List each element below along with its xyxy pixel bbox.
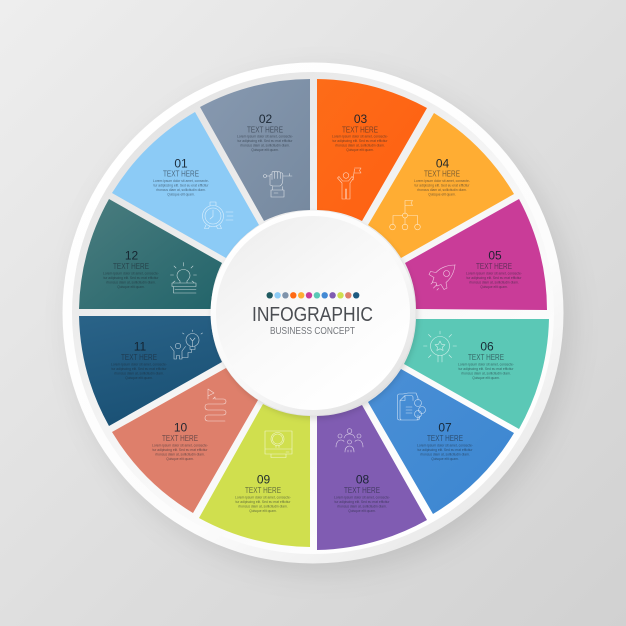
body text 08: tur adipiscing elit. Sed eu erat efficitur (335, 500, 390, 504)
body text 11: rhoncus diam at, sollicitudin diam. (114, 372, 164, 376)
body text 08 (334, 496, 390, 513)
heading 01: 01 (174, 156, 188, 170)
body text 07: Quisque elit quam. (431, 457, 459, 461)
body text 09 (235, 496, 291, 513)
body text 04 (414, 179, 470, 196)
heading 01: TEXT HERE (163, 168, 199, 178)
heading 12 (113, 248, 149, 271)
heading 02: 02 (259, 112, 272, 126)
body text 10: rhoncus diam at, sollicitudin diam. (155, 452, 205, 456)
body text 03: Lorem ipsum dolor sit amet, consecte- (332, 134, 388, 138)
outer white ring (62, 62, 564, 564)
body text 02: Lorem ipsum dolor sit amet, consecte- (237, 134, 293, 138)
body text 01: rhoncus diam at, sollicitudin diam. (156, 188, 206, 192)
heading 02: TEXT HERE (247, 124, 283, 134)
body text 12: tur adipiscing elit. Sed eu erat efficitur (104, 276, 159, 280)
body text 11: Lorem ipsum dolor sit amet, consecte- (111, 362, 167, 366)
heading 11: 11 (134, 340, 147, 354)
segment 03 (317, 79, 427, 221)
color dots (266, 292, 359, 298)
segment 02 (200, 79, 310, 221)
icon: raised fist (264, 171, 292, 197)
body text 08: Quisque elit quam. (348, 509, 376, 513)
heading 03 (342, 112, 378, 134)
body text 11 (111, 362, 167, 380)
body text 03: rhoncus diam at, sollicitudin diam. (335, 144, 385, 148)
body text 06: tur adipiscing elit. Sed eu erat efficitur (459, 367, 514, 371)
body text 01: Quisque elit quam. (167, 192, 195, 196)
icon: person and bulb (170, 330, 202, 359)
icon: people group (336, 429, 363, 452)
heading 07: TEXT HERE (427, 433, 463, 443)
icon: org flag (390, 200, 420, 230)
body text 04: Lorem ipsum dolor sit amet, consecte- (414, 179, 470, 183)
body text 02 (237, 134, 293, 152)
body text 05: tur adipiscing elit. Sed eu erat efficitur (467, 276, 522, 280)
body text 06: rhoncus diam at, sollicitudin diam. (461, 372, 511, 376)
body text 05: Quisque elit quam. (480, 285, 508, 289)
heading 11: TEXT HERE (121, 352, 157, 362)
icon: bulb on book (170, 262, 196, 293)
heading 07: 07 (438, 420, 452, 434)
icon: person with flag (338, 168, 361, 199)
panel: 07 (368, 369, 514, 514)
panel: 11 (79, 316, 222, 426)
body text 03: tur adipiscing elit. Sed eu erat efficitur (333, 139, 388, 143)
panel: 01 (112, 112, 259, 258)
panel: 06 (404, 319, 549, 429)
heading 09 (245, 472, 281, 495)
segment 07 (368, 369, 514, 514)
body text 06: Lorem ipsum dolor sit amet, consecte- (458, 362, 514, 366)
body text 02: rhoncus diam at, sollicitudin diam. (240, 144, 290, 148)
body text 09: rhoncus diam at, sollicitudin diam. (238, 504, 288, 508)
heading 04: 04 (436, 156, 449, 170)
ring shadow (72, 73, 572, 573)
heading 10 (162, 420, 198, 443)
body text 09: tur adipiscing elit. Sed eu erat efficitur (236, 500, 291, 504)
body text 11: tur adipiscing elit. Sed eu erat efficitur (112, 367, 167, 371)
panel: 09 (199, 404, 310, 547)
body text 01: Lorem ipsum dolor sit amet, consecte- (153, 179, 209, 183)
heading 12: TEXT HERE (113, 261, 149, 271)
panel: 03 (317, 79, 427, 221)
heading 06 (468, 340, 504, 362)
heading 11 (121, 340, 157, 362)
heading 02 (247, 112, 283, 134)
title: INFOGRAPHIC (252, 303, 373, 326)
center circle (210, 210, 416, 416)
body text 08: rhoncus diam at, sollicitudin diam. (337, 504, 387, 508)
heading 04: TEXT HERE (424, 168, 460, 178)
heading 08 (344, 472, 380, 495)
body text 04: rhoncus diam at, sollicitudin diam. (417, 188, 467, 192)
body text 09: Quisque elit quam. (249, 509, 277, 513)
body text 06: Quisque elit quam. (472, 376, 500, 380)
body text 12: Quisque elit quam. (117, 285, 145, 289)
heading 09: 09 (257, 472, 270, 486)
panel: 10 (112, 368, 258, 513)
body text 03 (332, 134, 388, 152)
heading 05 (476, 248, 512, 271)
body text 01 (153, 179, 209, 196)
body text 11: Quisque elit quam. (125, 376, 153, 380)
heading 04 (424, 156, 460, 178)
body text 10: tur adipiscing elit. Sed eu erat efficitur (153, 448, 208, 452)
heading 01 (163, 156, 199, 178)
panel: 05 (405, 199, 547, 310)
heading 10: TEXT HERE (162, 433, 198, 443)
heading 03: TEXT HERE (342, 124, 378, 134)
heading 10: 10 (174, 420, 187, 434)
panel: 12 (79, 199, 222, 309)
inner disc (72, 72, 554, 554)
center circle shadow (212, 213, 418, 419)
icon: winding path with flag (205, 389, 226, 421)
body text 12 (103, 272, 159, 289)
body text 07 (417, 444, 473, 461)
heading 09: TEXT HERE (245, 485, 281, 495)
body text 05 (466, 272, 522, 289)
subtitle: BUSINESS CONCEPT (270, 326, 355, 337)
body text 12: rhoncus diam at, sollicitudin diam. (106, 280, 156, 284)
segment 11 (79, 316, 222, 426)
segment 05 (405, 199, 547, 310)
body text 10: Quisque elit quam. (166, 457, 194, 461)
body text 02: Quisque elit quam. (251, 148, 279, 152)
icon: monitor (265, 431, 292, 458)
segment 08 (317, 405, 427, 550)
body text 04: Quisque elit quam. (428, 192, 456, 196)
panel: 08 (317, 405, 427, 550)
segment 04 (368, 113, 514, 258)
body text 02: tur adipiscing elit. Sed eu erat efficitur (238, 139, 293, 143)
body text 07: Lorem ipsum dolor sit amet, consecte- (417, 444, 473, 448)
body text 03: Quisque elit quam. (346, 148, 374, 152)
body text 12: Lorem ipsum dolor sit amet, consecte- (103, 272, 159, 276)
segment 09 (199, 404, 310, 547)
segment 10 (112, 368, 258, 513)
heading 05: 05 (488, 248, 502, 262)
heading 08: 08 (356, 472, 369, 486)
icon: stopwatch (202, 202, 233, 228)
heading 06: 06 (480, 340, 494, 354)
body text 07: rhoncus diam at, sollicitudin diam. (420, 452, 470, 456)
body text 07: tur adipiscing elit. Sed eu erat efficitur (418, 448, 473, 452)
panel: 04 (368, 113, 514, 258)
heading 06: TEXT HERE (468, 352, 504, 362)
panel: 02 (200, 79, 310, 221)
body text 09: Lorem ipsum dolor sit amet, consecte- (235, 496, 291, 500)
segment 01 (112, 112, 259, 258)
body text 04: tur adipiscing elit. Sed eu erat efficitur (415, 184, 470, 188)
segment 06 (404, 319, 549, 429)
icon: rocket (429, 264, 455, 290)
body text 06 (458, 362, 514, 380)
body text 05: Lorem ipsum dolor sit amet, consecte- (466, 272, 522, 276)
heading 08: TEXT HERE (344, 485, 380, 495)
heading 07 (427, 420, 463, 443)
heading 05: TEXT HERE (476, 261, 512, 271)
body text 10 (152, 444, 208, 461)
icon: star bulb (424, 331, 456, 362)
body text 05: rhoncus diam at, sollicitudin diam. (469, 280, 519, 284)
heading 12: 12 (125, 248, 138, 262)
body text 10: Lorem ipsum dolor sit amet, consecte- (152, 444, 208, 448)
body text 01: tur adipiscing elit. Sed eu erat efficitur (154, 184, 209, 188)
segment 12 (79, 199, 222, 309)
body text 08: Lorem ipsum dolor sit amet, consecte- (334, 496, 390, 500)
heading 03: 03 (354, 112, 367, 126)
icon: documents (398, 393, 426, 420)
